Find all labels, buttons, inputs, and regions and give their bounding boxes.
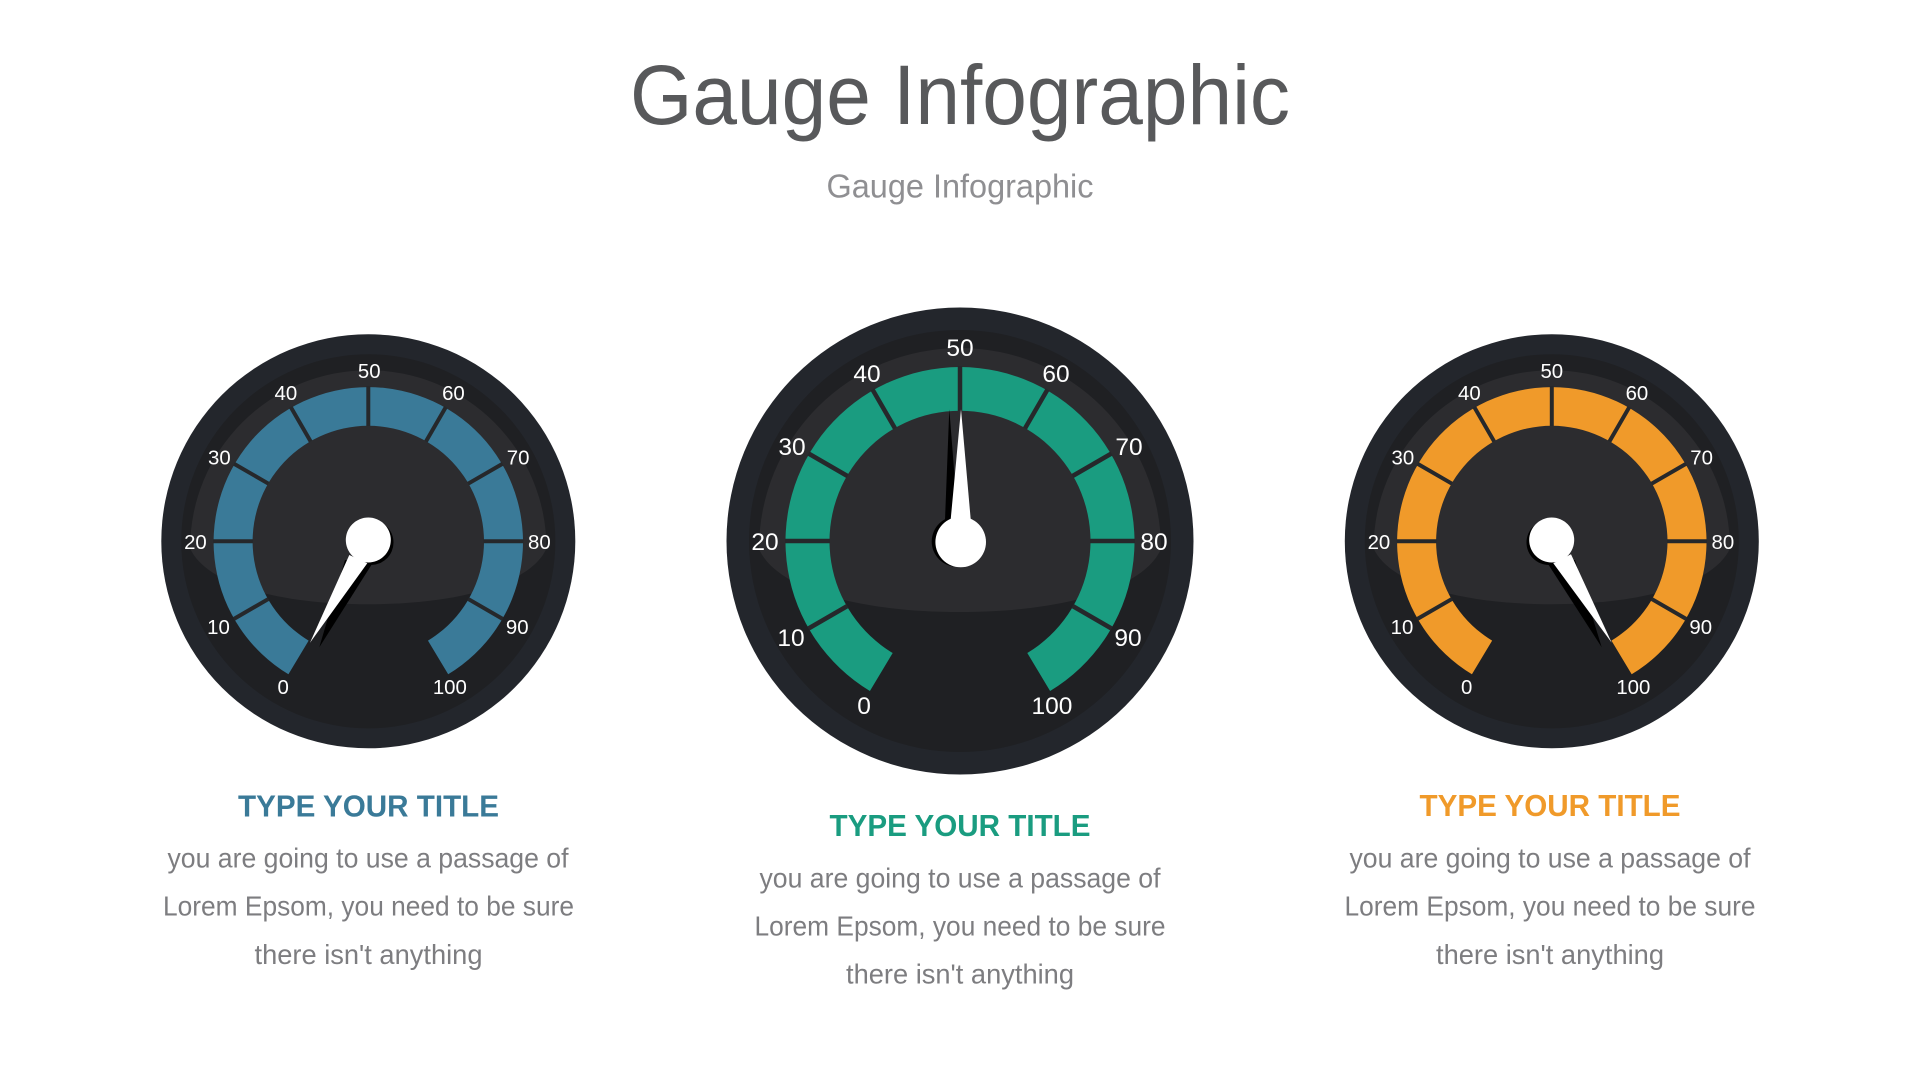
gauge dial: green: 100 — [1032, 693, 1072, 720]
gauge dial: green: 40 — [853, 361, 881, 388]
text block: blue: there isn't anything — [254, 939, 482, 970]
gauge dial: orange: 30 — [1392, 448, 1414, 470]
text block: green: there isn't anything — [846, 959, 1074, 990]
title: Gauge Infographic — [630, 48, 1290, 142]
gauge dial: blue: 0 — [278, 677, 289, 699]
text block: blue: Lorem Epsom, you need to be sure — [163, 891, 574, 922]
text block: blue — [163, 843, 574, 970]
text block: orange: there isn't anything — [1436, 939, 1664, 970]
gauge dial: green: 0 — [857, 693, 871, 720]
gauge dial: orange — [1345, 334, 1759, 748]
gauge dial: green: 20 — [751, 529, 779, 556]
gauge dial: green: 60 — [1042, 361, 1070, 388]
gauge dial: green — [726, 308, 1194, 774]
gauge dial: orange: 10 — [1391, 617, 1413, 639]
gauge dial: orange: 100 — [1616, 677, 1650, 699]
gauge dial: green: 90 — [1114, 625, 1142, 652]
text block: green: you are going to use a passage of — [760, 862, 1161, 893]
gauge dial: orange: 50 — [1540, 361, 1563, 383]
gauge dial: blue — [161, 334, 575, 748]
text block: green — [754, 862, 1166, 990]
gauge dial: blue: 90 — [506, 617, 529, 639]
needle: blue gauge — [310, 518, 394, 647]
gauge dial: blue: 60 — [442, 383, 465, 405]
text block: green: Lorem Epsom, you need to be sure — [754, 910, 1166, 941]
gauge dial: green: 10 — [777, 625, 805, 652]
needle: green gauge — [932, 409, 986, 567]
gauge dial: orange: 60 — [1626, 383, 1648, 405]
gauge dial: blue: 40 — [275, 383, 297, 405]
gauge dial: orange: 0 — [1461, 677, 1472, 699]
gauge dial: orange: 70 — [1690, 448, 1713, 470]
heading: blue: TYPE YOUR TITLE — [238, 789, 499, 824]
gauge dial: orange: 80 — [1712, 532, 1734, 554]
text block: blue: you are going to use a passage of — [168, 843, 569, 874]
heading: orange: TYPE YOUR TITLE — [1420, 788, 1680, 823]
gauge dial: blue: 100 — [433, 677, 467, 699]
panel: center green gauge — [726, 308, 1194, 990]
gauge dial: green: 70 — [1115, 434, 1143, 461]
gauge dial: blue: 70 — [507, 448, 529, 470]
gauge dial: blue: 10 — [207, 617, 230, 639]
gauge dial: orange: 40 — [1458, 383, 1481, 405]
gauge dial: blue: 30 — [208, 448, 231, 470]
subtitle: Gauge Infographic — [826, 168, 1094, 204]
gauge dial: blue: 20 — [184, 532, 207, 554]
text block: orange: Lorem Epsom, you need to be sure — [1344, 891, 1756, 922]
gauge dial: orange: 90 — [1689, 617, 1712, 639]
panel: right orange gauge — [1344, 334, 1759, 970]
needle: orange gauge — [1526, 518, 1612, 647]
gauge dial: orange: 20 — [1368, 532, 1390, 554]
text block: orange — [1344, 843, 1756, 970]
gauge dial: blue: 50 — [358, 361, 381, 383]
gauge dial: green: 50 — [946, 335, 974, 362]
text block: orange: you are going to use a passage of — [1350, 843, 1751, 874]
gauge dial: green: 30 — [778, 434, 806, 461]
gauge dial: blue: 80 — [528, 532, 551, 554]
panel: left blue gauge — [161, 334, 575, 970]
heading: green: TYPE YOUR TITLE — [830, 808, 1090, 843]
gauge dial: green: 80 — [1140, 529, 1168, 556]
